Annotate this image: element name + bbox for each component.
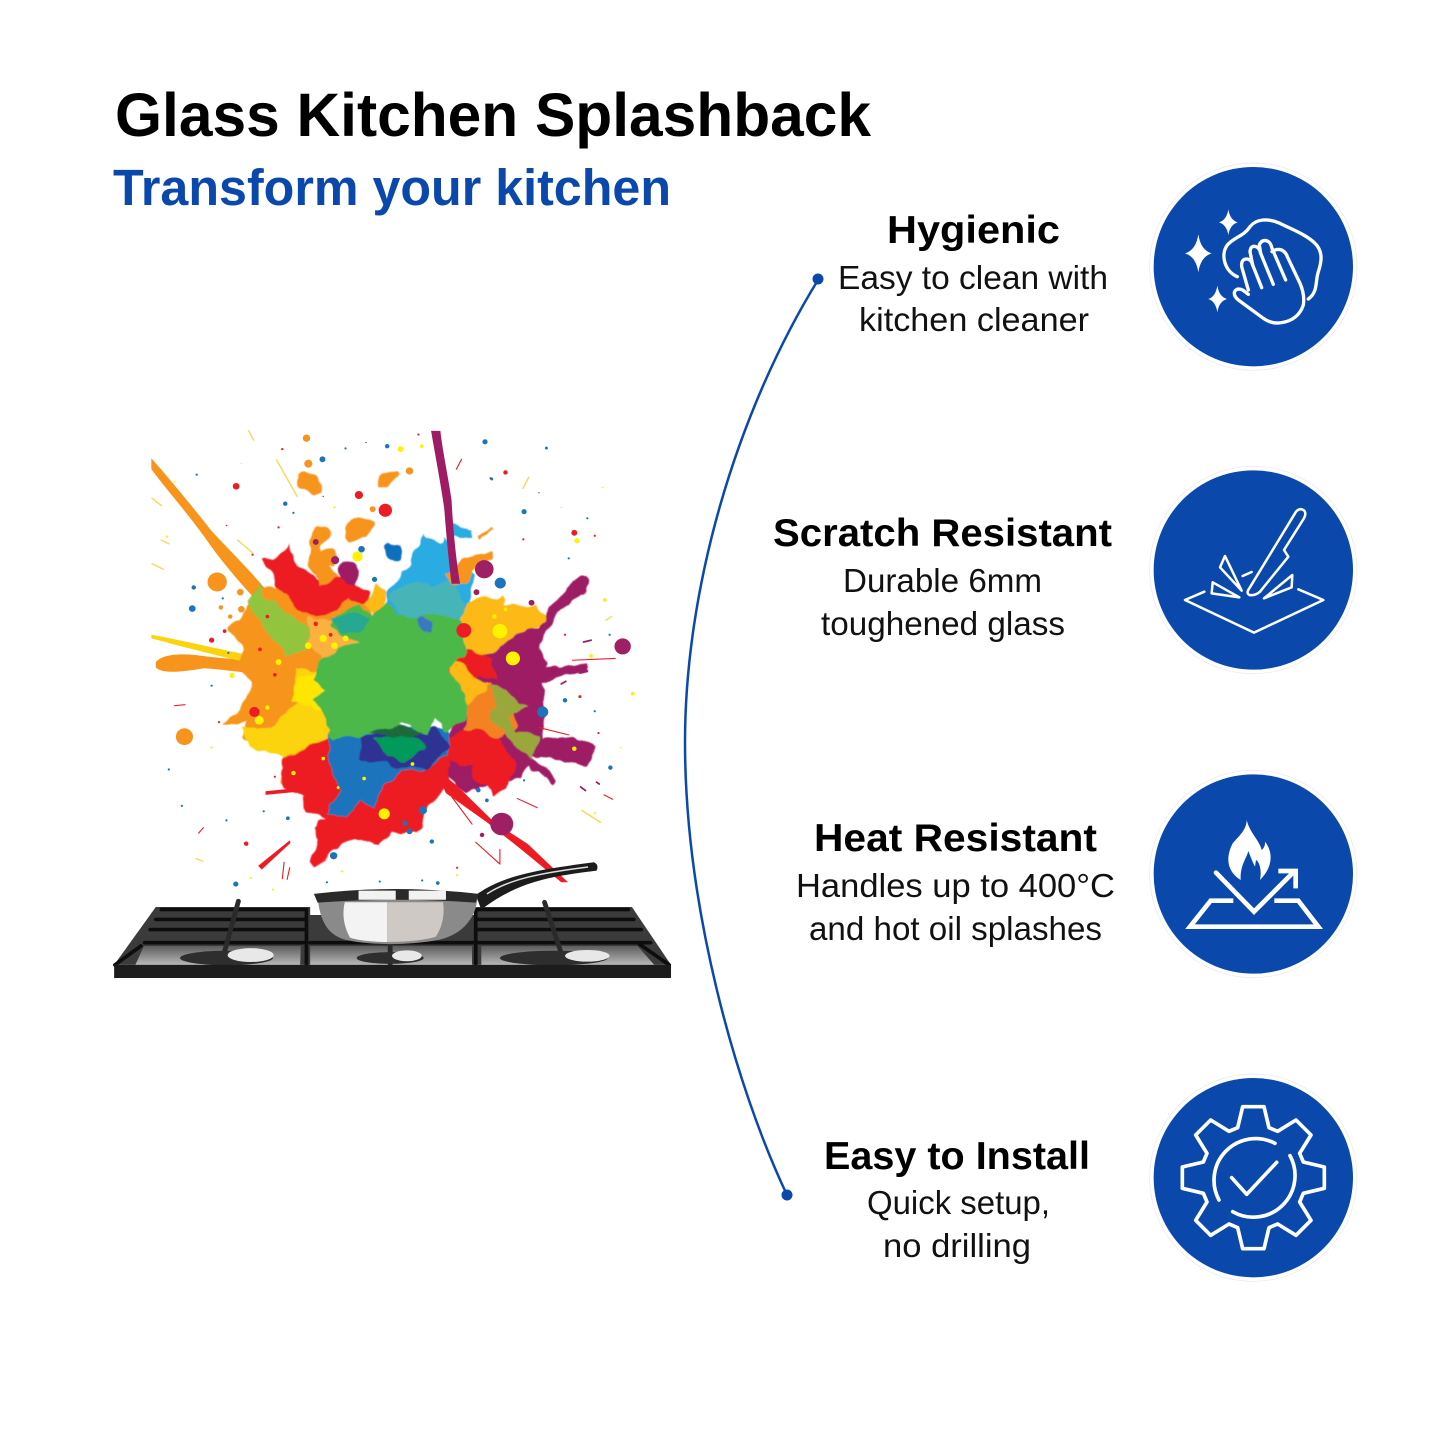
- description: Handles up to 400°C: [796, 867, 1115, 904]
- description: toughened glass: [821, 605, 1065, 642]
- description: and hot oil splashes: [809, 910, 1102, 947]
- frying pan: [314, 862, 597, 944]
- heading: Easy to Install: [824, 1135, 1090, 1178]
- connector dot bottom: [782, 1190, 792, 1200]
- icon: hand wiping with sparkles: [1150, 163, 1357, 370]
- title: Glass Kitchen Splashback: [115, 81, 871, 149]
- connector curve: [685, 274, 824, 1200]
- description: Easy to clean with: [838, 259, 1108, 296]
- feature: heat resistant: [796, 817, 1115, 947]
- subtitle: Transform your kitchen: [113, 159, 671, 216]
- icon: flame on surface with arrow: [1150, 770, 1357, 978]
- feature: hygienic: [838, 209, 1108, 338]
- description: Durable 6mm: [843, 562, 1042, 599]
- heading: Scratch Resistant: [773, 512, 1112, 555]
- gas hob: [114, 901, 671, 978]
- feature: scratch resistant: [773, 512, 1112, 642]
- description: [796, 867, 1115, 947]
- connector dot top: [812, 274, 824, 284]
- feature: easy to install: [824, 1135, 1090, 1264]
- illustration: paint splash above gas hob: [114, 431, 671, 978]
- paint splash: [151, 431, 635, 891]
- description: [867, 1184, 1050, 1264]
- description: no drilling: [883, 1227, 1031, 1264]
- description: kitchen cleaner: [859, 301, 1089, 338]
- description: [821, 562, 1065, 642]
- description: Quick setup,: [867, 1184, 1050, 1221]
- icon: knife scratching glass: [1150, 466, 1357, 674]
- icon: gear with check mark: [1150, 1074, 1357, 1281]
- description: [838, 259, 1108, 338]
- heading: Hygienic: [887, 209, 1060, 252]
- heading: Heat Resistant: [814, 817, 1097, 860]
